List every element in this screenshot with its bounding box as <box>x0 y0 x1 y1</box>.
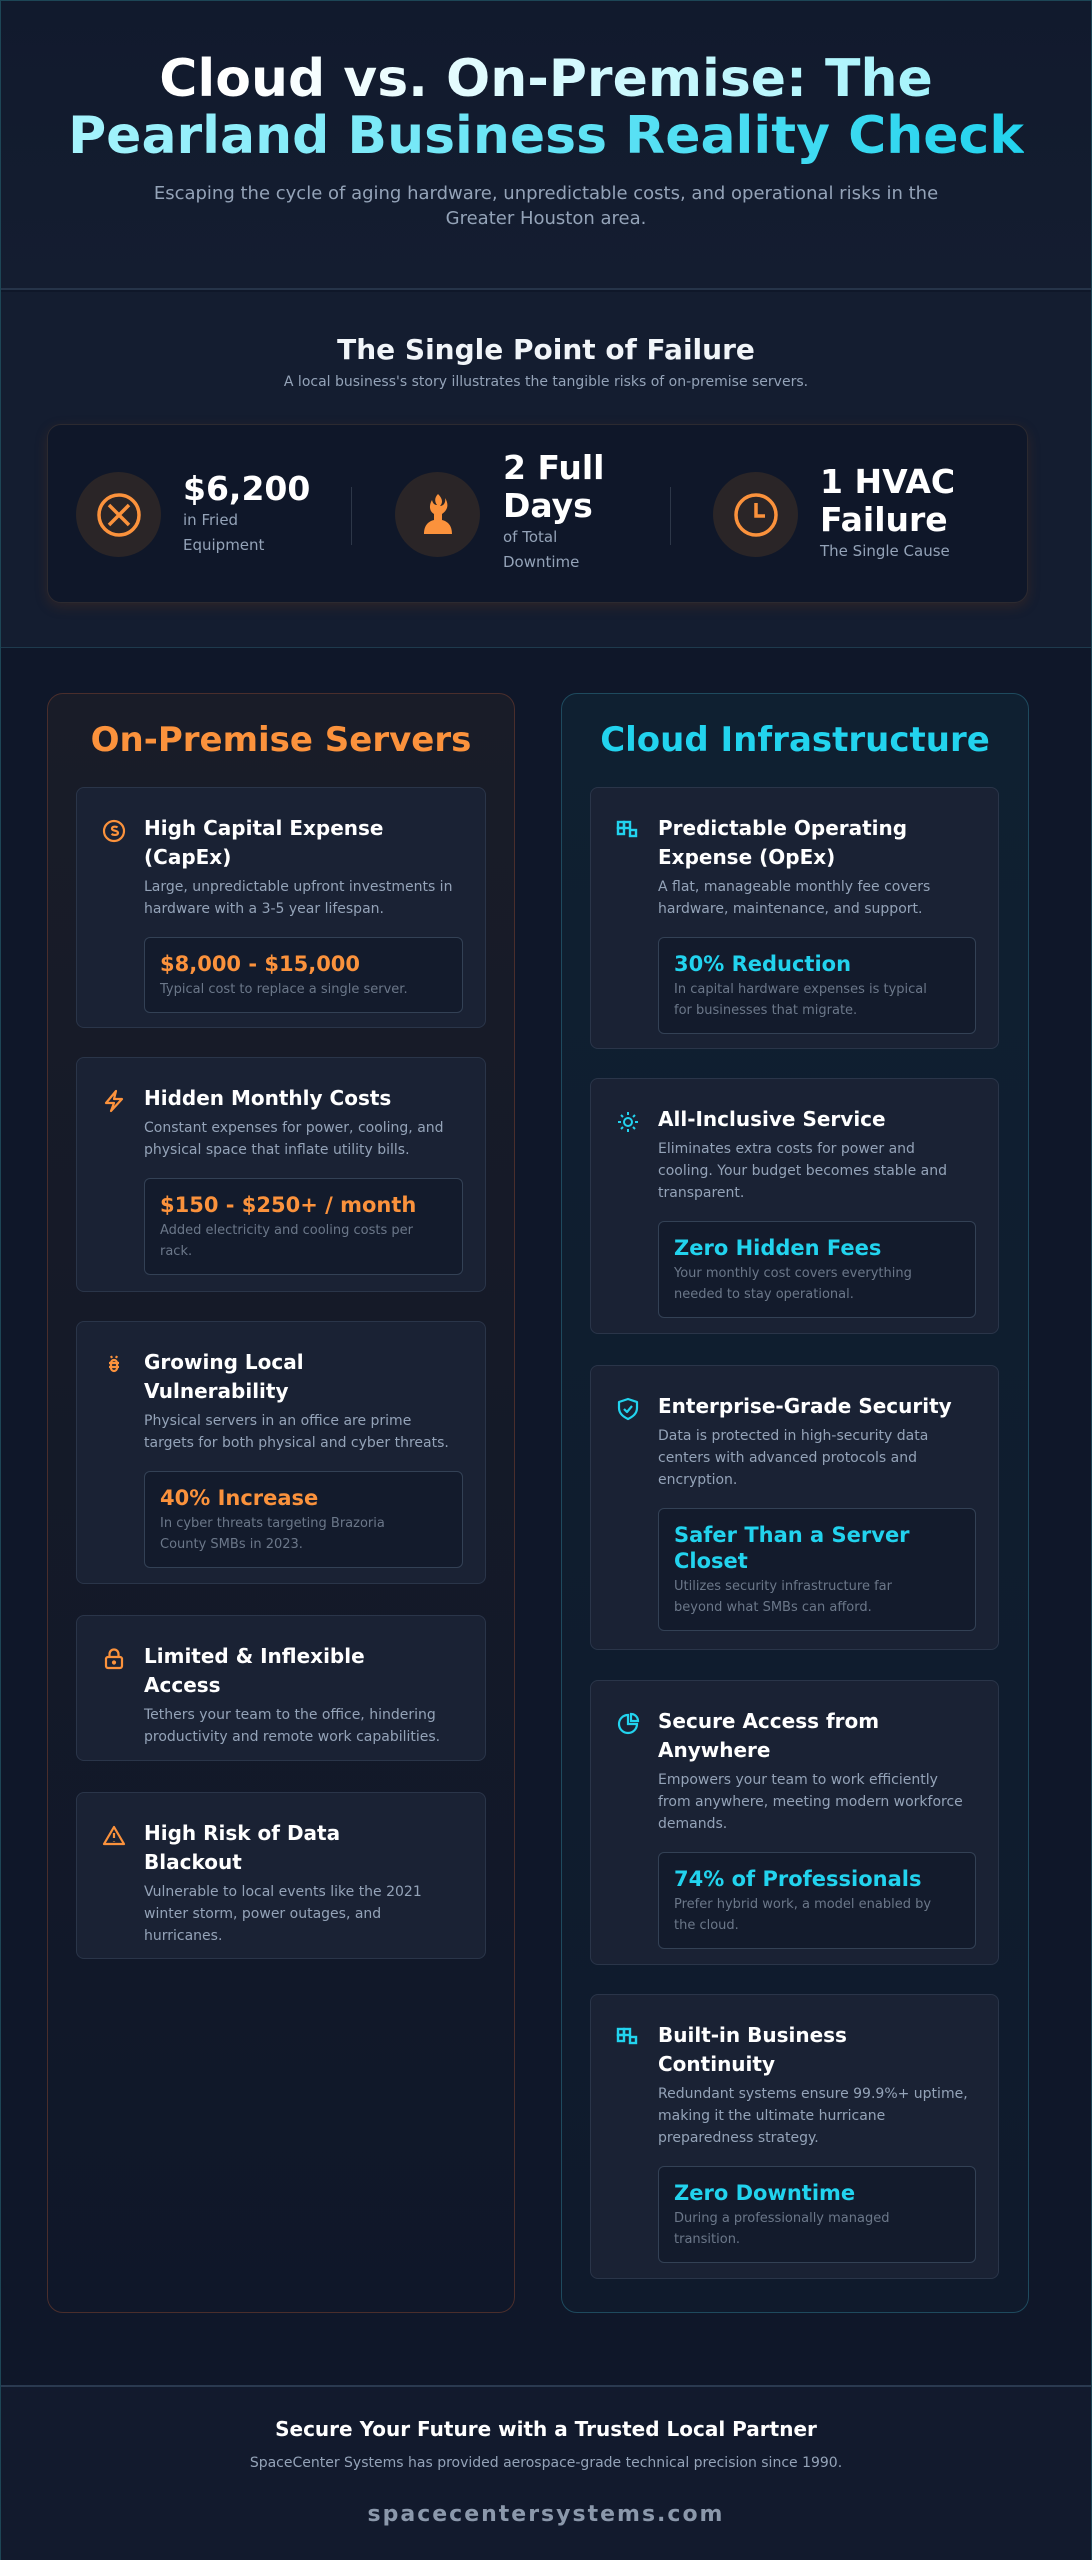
card: vulnerability: County SMBs in 2023. <box>160 1537 303 1552</box>
card: capex: Large, unpredictable upfront investments in hardware with a 3-5 year lifespan. <box>144 879 452 917</box>
card: secure access: the cloud. <box>674 1918 739 1933</box>
stat: 1 HVAC failure: The Single Cause <box>820 542 950 560</box>
card: hidden monthly costs <box>76 1057 486 1292</box>
card: all-inclusive: Eliminates extra costs for power and <box>658 1141 915 1157</box>
card: opex: A flat, manageable monthly fee covers <box>658 879 930 895</box>
card: opex: hardware, maintenance, and support. <box>658 901 922 917</box>
icon: blocks <box>616 2028 638 2044</box>
card: hidden monthly costs: Constant expenses for power, cooling, and physical space that inflate utility bills. <box>144 1120 444 1158</box>
card: secure access: Empowers your team to work efficiently <box>658 1772 938 1788</box>
card: continuity <box>590 1994 999 2279</box>
icon: downtime <box>395 472 480 557</box>
icon: dollar <box>102 820 126 842</box>
card: vulnerability: Growing Local <box>144 1350 304 1374</box>
card: security: beyond what SMBs can afford. <box>674 1600 872 1615</box>
card: hidden monthly costs: Hidden Monthly Costs <box>144 1086 391 1110</box>
card: all-inclusive <box>590 1078 999 1334</box>
title: Pearland Business Reality Check <box>68 106 1024 166</box>
card: capex: $8,000 - $15,000 <box>160 952 360 976</box>
card: limited access <box>76 1615 486 1761</box>
card: continuity: Zero Downtime <box>674 2181 855 2205</box>
footer heading: Secure Your Future with a Trusted Local Partner <box>275 2417 817 2441</box>
card: security: Safer Than a Server <box>674 1523 910 1547</box>
stat: 2 full days: of Total <box>503 528 557 546</box>
footer <box>1 2385 1091 2560</box>
stats card <box>47 424 1028 603</box>
icon: sun <box>618 1112 638 1132</box>
card: opex: Expense (OpEx) <box>658 845 835 869</box>
section heading: The Single Point of Failure <box>337 333 755 366</box>
stat: $6,200: $6,200 <box>183 469 310 508</box>
icon: clock <box>713 472 798 557</box>
stat: $6,200: Equipment <box>183 536 264 554</box>
card: all-inclusive: cooling. Your budget becomes stable and <box>658 1163 947 1179</box>
stat: $6,200 <box>183 469 310 554</box>
card: security: Data is protected in high-security data <box>658 1428 928 1444</box>
icon: blocks <box>616 820 638 838</box>
card: data blackout <box>76 1792 486 1959</box>
icon: fried equipment <box>76 472 161 557</box>
icon: warning <box>102 1826 126 1846</box>
card: capex: High Capital Expense (CapEx) <box>144 816 383 869</box>
card: hidden monthly costs: $150 - $250+ / month <box>160 1193 416 1217</box>
card: vulnerability: 40% Increase <box>160 1486 318 1510</box>
icon: bug <box>109 1356 119 1372</box>
card: secure access: Secure Access from <box>658 1709 879 1733</box>
title: Cloud vs. On-Premise: The <box>159 49 933 109</box>
icon: shield <box>618 1398 638 1420</box>
card: security: encryption. <box>658 1472 737 1488</box>
card: limited access: Limited & Inflexible <box>144 1644 365 1668</box>
card: security: Enterprise-Grade Security <box>658 1394 952 1418</box>
icon: lightning <box>104 1090 124 1112</box>
card: data blackout: Blackout <box>144 1850 242 1874</box>
card: vulnerability <box>76 1321 486 1584</box>
stat: 2 full days: 2 Full <box>503 448 604 487</box>
card: all-inclusive: All-Inclusive Service <box>658 1107 886 1131</box>
card: vulnerability: Physical servers in an office are prime <box>144 1413 411 1429</box>
card: security: centers with advanced protocols and <box>658 1450 917 1466</box>
card: secure access <box>590 1680 999 1965</box>
card: continuity: Redundant systems ensure 99.9%+ uptime, <box>658 2086 968 2102</box>
section: single point of failure <box>1 292 1091 648</box>
card: all-inclusive: Your monthly cost covers everything <box>674 1266 912 1281</box>
card: secure access: from anywhere, meeting modern workforce <box>658 1794 963 1810</box>
card: data blackout: Vulnerable to local events like the 2021 <box>144 1884 422 1900</box>
card: secure access: demands. <box>658 1816 727 1832</box>
card: opex: In capital hardware expenses is typical <box>674 982 927 997</box>
card: continuity: During a professionally managed <box>674 2211 889 2226</box>
card: hidden monthly costs: Added electricity and cooling costs per rack. <box>160 1223 413 1259</box>
stat: 1 HVAC failure: 1 HVAC <box>820 462 955 501</box>
card: data blackout: hurricanes. <box>144 1928 222 1944</box>
card: continuity: preparedness strategy. <box>658 2130 819 2146</box>
panel heading: Cloud Infrastructure <box>600 720 990 760</box>
card: vulnerability: targets for both physical and cyber threats. <box>144 1435 449 1451</box>
card: security: Utilizes security infrastructure far <box>674 1579 892 1594</box>
icon: pie <box>618 1712 640 1734</box>
header background <box>1 1 1091 290</box>
card: opex: Predictable Operating <box>658 816 907 840</box>
card: all-inclusive: Zero Hidden Fees <box>674 1236 881 1260</box>
card: limited access: Tethers your team to the office, hindering productivity and remote work capabilities. <box>144 1707 440 1745</box>
section subheading: A local business's story illustrates the tangible risks of on-premise servers. <box>284 374 808 390</box>
card: opex <box>590 787 999 1049</box>
panel heading: On-Premise Servers <box>91 720 471 760</box>
card: capex: Typical cost to replace a single server. <box>160 982 408 997</box>
card: data blackout: High Risk of Data <box>144 1821 340 1845</box>
stat: $6,200: in Fried <box>183 511 238 529</box>
stat: 1 HVAC failure <box>820 462 955 560</box>
panel: cloud infrastructure <box>561 693 1029 2313</box>
stat: 2 full days <box>503 448 604 571</box>
stat: 2 full days: Downtime <box>503 553 579 571</box>
stat: 1 HVAC failure: Failure <box>820 500 948 539</box>
stat: 2 full days: Days <box>503 486 593 525</box>
card: continuity: transition. <box>674 2232 740 2247</box>
title <box>68 49 1024 166</box>
card: opex: 30% Reduction <box>674 952 851 976</box>
card: opex: for businesses that migrate. <box>674 1003 857 1018</box>
icon: lock <box>104 1648 124 1670</box>
card: capex <box>76 787 486 1028</box>
card: security: Closet <box>674 1549 748 1573</box>
card: limited access: Access <box>144 1673 221 1697</box>
card: data blackout: winter storm, power outages, and <box>144 1906 381 1922</box>
card: secure access: 74% of Professionals <box>674 1867 921 1891</box>
card: secure access: Anywhere <box>658 1738 770 1762</box>
card: continuity: Built-in Business <box>658 2023 847 2047</box>
subtitle: Escaping the cycle of aging hardware, unpredictable costs, and operational risks in the Greater Houston area. <box>154 183 938 229</box>
card: all-inclusive: transparent. <box>658 1185 744 1201</box>
card: continuity: Continuity <box>658 2052 775 2076</box>
footer text: SpaceCenter Systems has provided aerospace-grade technical precision since 1990. <box>250 2455 842 2471</box>
panel: on-premise servers <box>47 693 515 2313</box>
card: security <box>590 1365 999 1650</box>
card: all-inclusive: needed to stay operational. <box>674 1287 854 1302</box>
card: continuity: making it the ultimate hurricane <box>658 2108 885 2124</box>
footer url: spacecentersystems.com <box>368 2502 724 2527</box>
card: vulnerability: Vulnerability <box>144 1379 289 1403</box>
card: vulnerability: In cyber threats targeting Brazoria <box>160 1516 385 1531</box>
card: secure access: Prefer hybrid work, a model enabled by <box>674 1897 931 1912</box>
